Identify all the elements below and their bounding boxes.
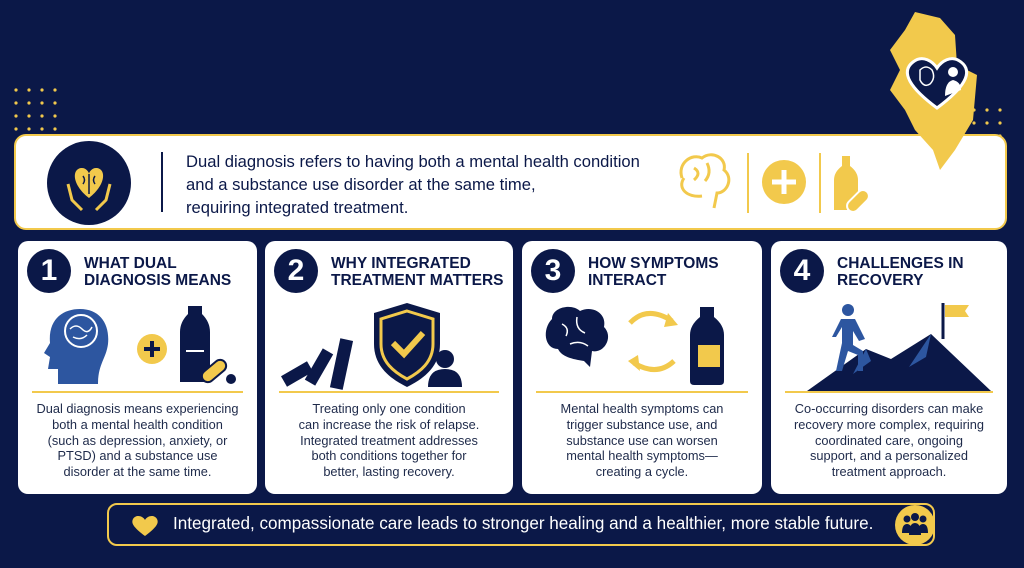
card 3 illustration: brain cycle bottle: [546, 306, 724, 385]
card 3 text: substance use can worsen: [566, 433, 718, 448]
card 1 text: disorder at the same time.: [64, 464, 211, 479]
card 2 title: [331, 255, 504, 289]
NJ map with heart icon: [890, 12, 977, 170]
card 2 title: TREATMENT MATTERS: [331, 272, 504, 289]
card 4 title: CHALLENGES IN: [837, 255, 964, 272]
card 1 text: both a mental health condition: [52, 417, 223, 432]
card 4: 4: [794, 254, 810, 287]
card 3 title: HOW SYMPTOMS: [588, 255, 719, 272]
intro text: requiring integrated treatment.: [186, 198, 408, 217]
intro text: and a substance use disorder at the same time,: [186, 175, 536, 194]
card 3 title: [588, 255, 719, 289]
card 3 title: INTERACT: [588, 272, 666, 289]
icon: hands holding brain heart: [47, 141, 131, 225]
card 1 title: [84, 255, 231, 289]
card 1 text: PTSD) and a substance use: [57, 448, 218, 463]
card 4 text: [794, 401, 984, 479]
intro banner: [14, 134, 1007, 230]
card 2 text: better, lasting recovery.: [323, 464, 455, 479]
card 2 text: can increase the risk of relapse.: [299, 417, 479, 432]
card 4 text: coordinated care, ongoing: [815, 433, 963, 448]
card 1 text: Dual diagnosis means experiencing: [36, 401, 239, 416]
card 3 text: mental health symptoms—: [566, 448, 718, 463]
vertical divider: [161, 152, 163, 212]
icon row: brain plus bottle: [680, 153, 868, 213]
card 2 text: both conditions together for: [311, 448, 467, 463]
card 4 text: recovery more complex, requiring: [794, 417, 984, 432]
card 1 title: WHAT DUAL: [84, 255, 177, 272]
card 3 text: trigger substance use, and: [567, 417, 717, 432]
card 4: [771, 241, 1007, 494]
card 2 illustration: dominoes and shield: [281, 303, 462, 390]
card 1 title: DIAGNOSIS MEANS: [84, 272, 231, 289]
card 3: 3: [545, 254, 561, 287]
card 4 illustration: climber and flag: [807, 303, 991, 391]
card 4 text: support, and a personalized: [810, 448, 968, 463]
card 1 illustration: head plus bottle: [44, 306, 236, 384]
card 2 text: Treating only one condition: [312, 401, 466, 416]
card 3 text: creating a cycle.: [596, 464, 688, 479]
card 4 text: treatment approach.: [832, 464, 946, 479]
intro text: [186, 152, 640, 217]
bottom message text: Integrated, compassionate care leads to stronger healing and a healthier, more stable future.: [173, 514, 873, 533]
card 3: [522, 241, 762, 494]
card 1 text: [36, 401, 239, 479]
icon: people group: [895, 505, 933, 544]
card 2: [265, 241, 513, 494]
decorative dots right: [972, 108, 1002, 136]
card 2 text: [299, 401, 479, 479]
card 2: 2: [288, 254, 304, 287]
icon: heart: [132, 516, 158, 536]
card 1 text: (such as depression, anxiety, or: [48, 433, 227, 448]
card 4 title: [837, 255, 964, 289]
decorative dots left: [14, 88, 57, 131]
card 1: 1: [41, 254, 57, 287]
intro text: Dual diagnosis refers to having both a mental health condition: [186, 152, 640, 171]
card 4 text: Co-occurring disorders can make: [795, 401, 983, 416]
card 4 title: RECOVERY: [837, 272, 923, 289]
bottom message bar: [107, 503, 935, 546]
card 1: [18, 241, 257, 494]
card 2 title: WHY INTEGRATED: [331, 255, 471, 272]
card 3 text: Mental health symptoms can: [561, 401, 723, 416]
card 2 text: Integrated treatment addresses: [300, 433, 478, 448]
card 3 text: [561, 401, 723, 479]
